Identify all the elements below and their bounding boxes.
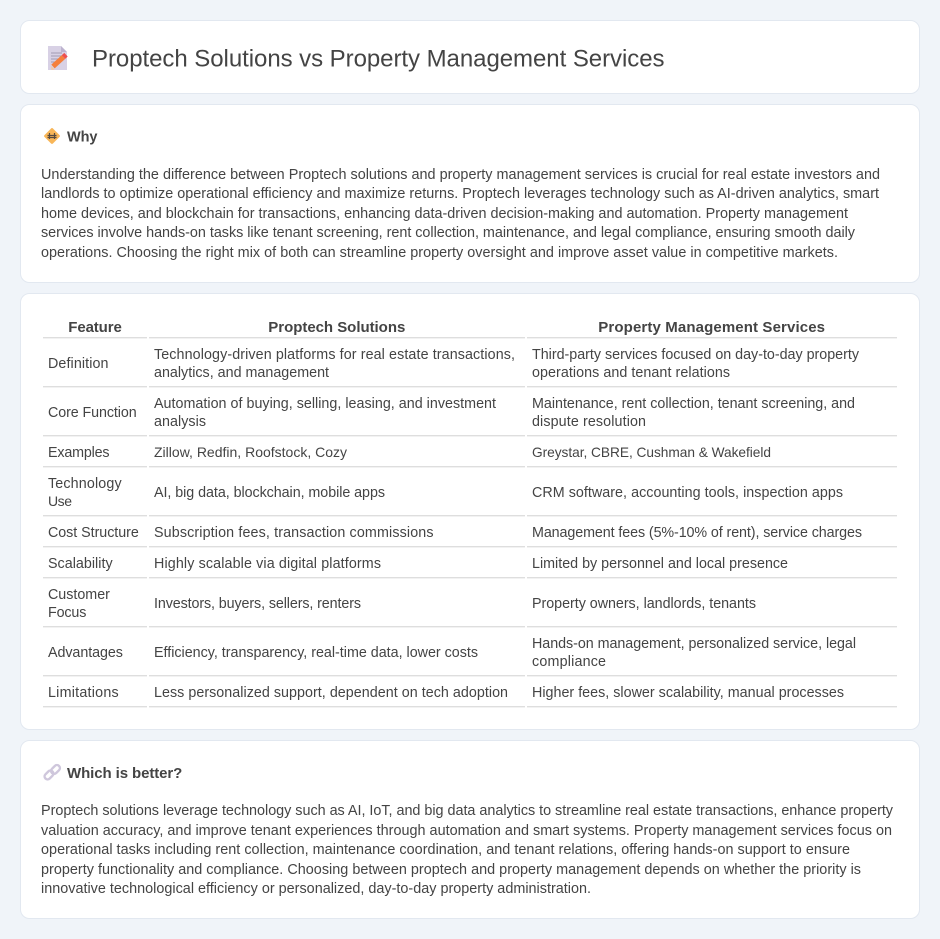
- heading: which is better: Which is better?: [67, 765, 182, 782]
- panel: title card: [20, 20, 920, 94]
- row: core function: Core Function: [48, 405, 137, 421]
- text block: why paragraph: landlords to optimize operational efficiency and maximize returns. Proptech leverages technology such as AI-driven analytics, smart: [41, 186, 879, 202]
- title: Proptech Solutions vs Property Management Services: [92, 46, 664, 72]
- row: advantages: [48, 636, 856, 670]
- row: examples: Greystar, CBRE, Cushman & Wakefield: [532, 445, 771, 460]
- text block: which is better paragraph: [41, 803, 894, 897]
- row: definition: operations and tenant relations: [532, 365, 730, 381]
- row: definition: analytics, and management: [154, 365, 329, 381]
- row: advantages: Efficiency, transparency, real-time data, lower costs: [154, 645, 478, 661]
- row: scalability: Scalability: [48, 556, 113, 572]
- row: cost structure: [48, 525, 862, 541]
- text block: which is better paragraph: operational tasks including rent collection, maintenance coordination, and tenant relations, offering hands-on support to ensure: [41, 842, 850, 858]
- row: core function: Automation of buying, selling, leasing, and investment: [154, 396, 496, 412]
- row: customer focus: [48, 587, 756, 621]
- text block: why paragraph: Understanding the difference between Proptech solutions and property management services is crucial for real estate investors and: [41, 167, 880, 183]
- row: limitations: [48, 685, 844, 701]
- text block: why paragraph: home devices, and blockchain for transactions, enhancing data-driven decision-making and automation. Property management: [41, 206, 848, 222]
- row: core function: dispute resolution: [532, 414, 646, 430]
- row: cost structure: Cost Structure: [48, 525, 139, 541]
- header: proptech solutions: Proptech Solutions: [268, 319, 405, 336]
- header: feature: Feature: [68, 319, 122, 336]
- row: technology use: [48, 476, 843, 509]
- row: scalability: Limited by personnel and local presence: [532, 556, 788, 572]
- panel: comparison table: [20, 294, 920, 730]
- row: limitations: Limitations: [48, 685, 119, 701]
- row: scalability: [48, 556, 788, 572]
- text block: which is better paragraph: Proptech solutions leverage technology such as AI, IoT, and big data analytics to streamline real estate transactions, enhance property: [41, 803, 894, 819]
- table: comparison: [43, 319, 897, 707]
- row: customer focus: Investors, buyers, sellers, renters: [154, 596, 361, 612]
- row: technology use: CRM software, accounting tools, inspection apps: [532, 485, 843, 501]
- icon: chain link: [43, 764, 61, 781]
- row: cost structure: Management fees (5%-10% of rent), service charges: [532, 525, 862, 541]
- text block: which is better paragraph: property functionality and compliance. Choosing between proptech and property management depends on whether the priority is: [41, 862, 861, 878]
- icon: document with pencil: [48, 46, 67, 70]
- row: examples: [48, 444, 771, 461]
- row: technology use: Technology: [48, 476, 122, 492]
- row: technology use: AI, big data, blockchain, mobile apps: [154, 485, 385, 501]
- text block: which is better paragraph: innovative technological efficiency or personalized, day-to-day property administration.: [41, 881, 591, 897]
- row: definition: Technology-driven platforms for real estate transactions,: [154, 347, 515, 363]
- row: advantages: Hands-on management, personalized service, legal: [532, 636, 856, 652]
- panel: why: [20, 104, 920, 282]
- icon: warning diamond: [44, 128, 60, 144]
- row: advantages: compliance: [532, 654, 606, 670]
- heading: why: Why: [67, 130, 98, 146]
- row: examples: Zillow, Redfin, Roofstock, Cozy: [154, 444, 347, 460]
- row: definition: Definition: [48, 356, 109, 372]
- panel: which is better: [20, 740, 920, 918]
- text block: which is better paragraph: valuation accuracy, and improve tenant experiences through automation and smart systems. Property management services focus on: [41, 823, 892, 839]
- row: customer focus: Property owners, landlords, tenants: [532, 596, 756, 612]
- row: definition: [48, 347, 860, 381]
- row: advantages: Advantages: [48, 645, 123, 661]
- row: customer focus: Customer: [48, 587, 110, 603]
- row: technology use: Use: [48, 493, 72, 509]
- row: cost structure: Subscription fees, transaction commissions: [154, 525, 434, 541]
- row: definition: Third-party services focused on day-to-day property: [532, 347, 860, 363]
- text block: why paragraph: [41, 167, 880, 261]
- row: core function: [48, 396, 855, 430]
- row: core function: analysis: [154, 414, 206, 430]
- row: limitations: Higher fees, slower scalability, manual processes: [532, 685, 844, 701]
- row: limitations: Less personalized support, dependent on tech adoption: [154, 685, 508, 701]
- text block: why paragraph: operations. Choosing the right mix of both can streamline property oversight and improve asset value in competitive markets.: [41, 245, 838, 261]
- row: scalability: Highly scalable via digital platforms: [154, 556, 381, 572]
- header: property management services: Property Management Services: [598, 319, 825, 336]
- row: examples: Examples: [48, 445, 110, 461]
- row: customer focus: Focus: [48, 605, 86, 621]
- text block: why paragraph: services involve hands-on tasks like tenant screening, rent collection, maintenance, and legal compliance, ensuring smooth daily: [41, 225, 856, 241]
- row: core function: Maintenance, rent collection, tenant screening, and: [532, 396, 855, 412]
